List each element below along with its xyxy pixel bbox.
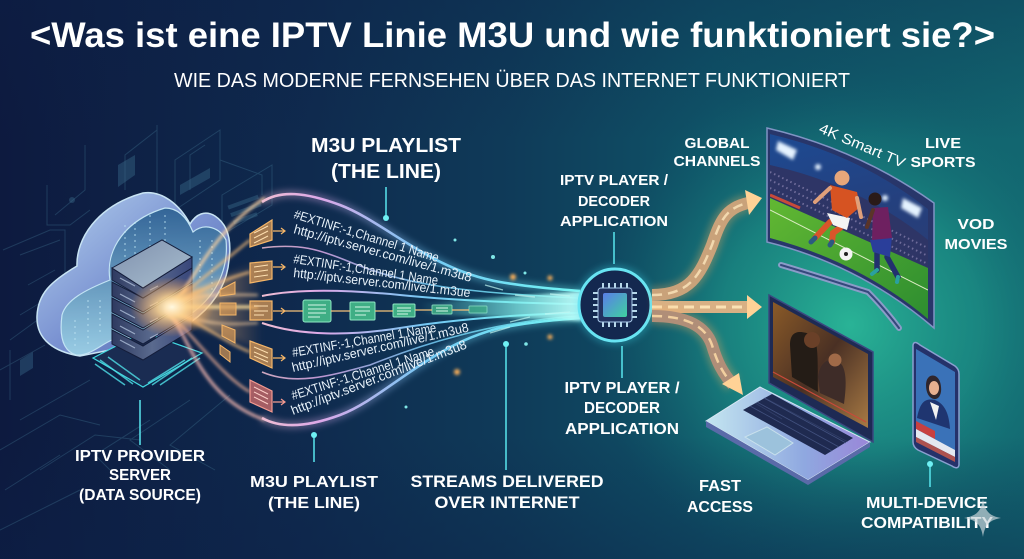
TV screen [770,134,928,325]
label: IPTV player bottom: DECODER [584,400,660,417]
M3U playlist tube outline [262,194,580,425]
news ticker [916,421,955,462]
arrow: to laptop [652,295,762,319]
row 2: http://iptv.server.com/live/1.m3ue [293,265,471,300]
icon: cloud [37,193,230,356]
label: M3U playlist bottom: (THE LINE) [268,495,360,512]
laptop movie screen [773,302,868,428]
icon: sparkle watermark [964,499,1001,537]
label: fast access: ACCESS [687,499,753,516]
label: IPTV provider server: (DATA SOURCE) [79,487,201,504]
doc row 3 [250,301,285,320]
label: live sports [910,135,976,171]
arrow: to TV [652,190,762,295]
row 2: #EXTINF:-1,Channel 1 Name [293,251,439,288]
server base plate [93,332,202,387]
laptop base [706,387,870,480]
label: live sports: SPORTS [910,154,976,171]
row 5: http://iptv.server.com/live/1.m3u8 [289,337,469,418]
icon: chip decoder [575,265,655,345]
row 1: http://iptv.server.com/live/1.m3u8 [292,221,474,285]
label: fast access [687,478,753,516]
label: streams delivered: OVER INTERNET [434,493,580,512]
label: streams delivered: STREAMS DELIVERED [410,472,604,491]
label: IPTV provider server: SERVER [109,467,171,484]
smart TV [767,128,934,328]
label: VOD movies [944,216,1008,253]
row 5: #EXTINF:-1,Channel 1 Name [289,344,436,403]
player blue [867,192,898,282]
label: M3U playlist top: (THE LINE) [331,161,441,183]
keyboard [743,394,853,455]
title: <Was ist eine IPTV Linie M3U und wie funktioniert sie?> [30,16,995,55]
central data beam [420,285,582,333]
label: IPTV provider server: IPTV PROVIDER [75,448,205,465]
phone screen [916,349,955,452]
label: IPTV player top [560,172,669,230]
connector lines [140,187,933,487]
row 4: #EXTINF:-1,Channel 1 Name [291,320,437,360]
laptop [706,295,873,485]
green stream documents [285,300,487,322]
label: M3U playlist top: M3U PLAYLIST [311,135,461,157]
TV body [767,128,934,328]
laptop lid [769,295,873,442]
label: M3U playlist bottom: M3U PLAYLIST [250,474,378,491]
label: fast access: FAST [699,478,741,495]
label: global channels: GLOBAL [684,135,750,152]
label: IPTV player top: DECODER [578,193,650,210]
floodlights [776,141,922,218]
arrow: to keyboard [652,316,743,395]
label: M3U playlist top [311,135,461,183]
label: streams delivered [410,472,604,512]
label: M3U playlist bottom [250,474,378,512]
doc row 5 pink [250,380,285,412]
server light flare [130,277,214,337]
label: multi-device compatibility: MULTI-DEVICE [866,495,988,512]
circuit board pattern [0,125,272,530]
player progress [773,372,866,422]
small docs [220,282,236,362]
label: IPTV player bottom [564,380,680,438]
doc row 1 [250,220,285,247]
label: IPTV player bottom: APPLICATION [565,421,679,438]
row 1: #EXTINF:-1,Channel 1 Name [292,207,441,265]
movie couple [790,332,846,404]
playlist document icons [220,220,285,412]
row 4: http://iptv.server.com/live/1.m3u8 [290,320,470,375]
football [840,248,852,260]
phone [913,342,959,468]
icon: server stack [93,240,202,387]
light cone from server [165,262,262,350]
doc row 2 [250,261,285,283]
TV stand [781,265,899,328]
label: 4K Smart TV: 4K Smart TV [816,121,908,172]
stadium crowd [770,165,928,270]
playlist text rows [289,207,474,418]
sparkle particles [404,238,552,408]
trackpad [745,427,793,455]
label: live sports: LIVE [925,135,961,152]
label: VOD movies: MOVIES [944,236,1008,253]
label: global channels: CHANNELS [674,153,760,170]
label: global channels [674,135,760,170]
data streams from server [165,198,265,420]
label: multi-device compatibility [861,495,993,532]
label: IPTV player bottom: IPTV PLAYER / [564,380,680,397]
label: IPTV player top: IPTV PLAYER / [560,172,669,189]
label: IPTV provider server [75,448,205,504]
label: VOD movies: VOD [958,216,995,233]
doc row 4 [250,341,285,368]
football pitch [770,198,928,325]
player orange [811,170,861,245]
circuit board accents [20,155,264,376]
label: IPTV player top: APPLICATION [560,213,668,230]
news presenter [917,375,950,429]
subtitle: WIE DAS MODERNE FERNSEHEN ÜBER DAS INTERNET FUNKTIONIERT [174,70,850,92]
label: multi-device compatibility: COMPATIBILITY [861,515,993,532]
